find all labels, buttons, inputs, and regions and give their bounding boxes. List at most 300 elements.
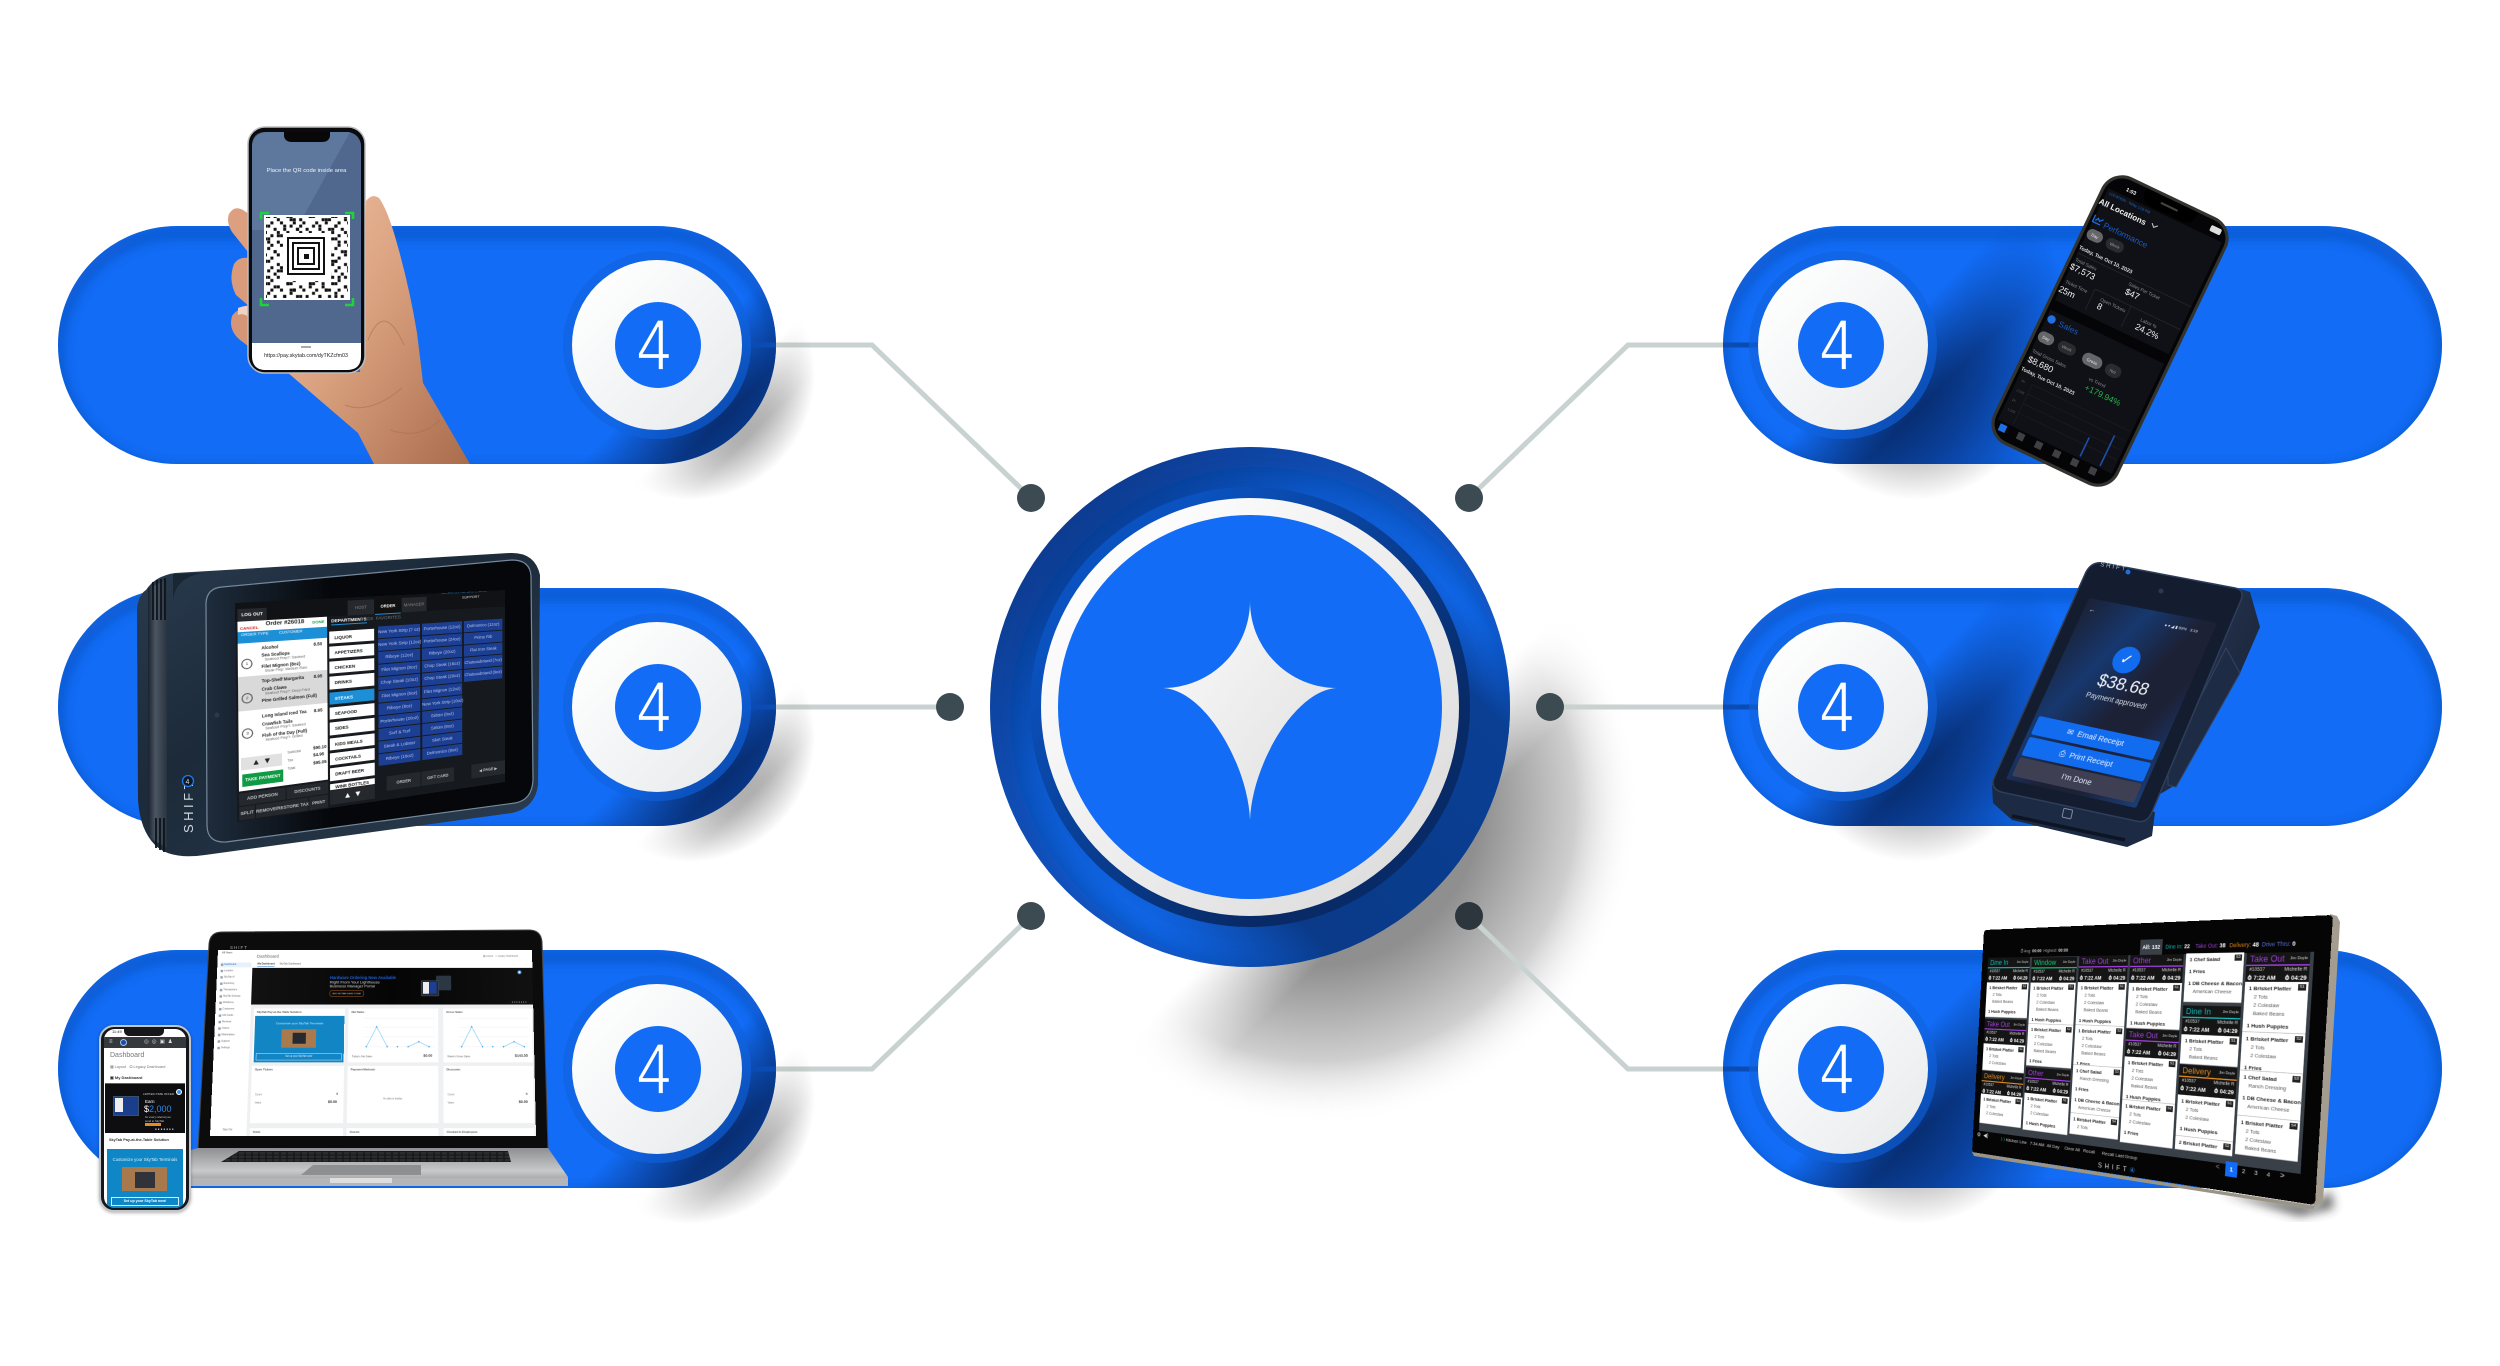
POS screen interface: GIFT CARD	[427, 773, 448, 780]
device: laptop dashboard	[126, 930, 568, 1186]
ticket column 4: 1 Hush Puppies	[2126, 1094, 2161, 1103]
ticket column 5: 1 Fries	[2189, 968, 2205, 974]
ticket column 1: 2 Tots	[1989, 1053, 1999, 1059]
ticket column 5: #10537	[2182, 1078, 2196, 1084]
ticket column 4: 2 Tots	[2136, 994, 2148, 1000]
POS screen interface: APPETIZERS	[334, 648, 363, 655]
laptop screen interface: Settings	[221, 1047, 230, 1049]
ticket column 4: ⏱ 04:29	[2158, 1050, 2176, 1057]
receipt order panel: 2	[246, 695, 248, 700]
ticket column 3: 1 Fries	[2076, 1061, 2090, 1067]
ticket column 2: Michelle R	[2058, 969, 2075, 974]
ticket column 2: 2 Tots	[2037, 992, 2047, 998]
POS screen interface: Porterhouse (20oz)	[380, 715, 419, 724]
POS screen interface: Surf & Turf	[389, 728, 410, 735]
banner: Business Manager Portal	[330, 984, 375, 988]
POS screen interface: SIDES	[335, 725, 349, 731]
ticket column 1: 1 Brisket Platter	[1983, 1096, 2011, 1105]
ticket column 6: Michelle R	[2284, 967, 2307, 972]
POS screen interface: WINE BOTTLES	[335, 779, 369, 789]
POS screen interface: Delmonico (12oz)	[467, 622, 499, 628]
receipt order panel: 1	[246, 661, 248, 666]
ticket column 6: 2 Coleslaw	[2250, 1052, 2276, 1060]
POS screen interface: REMOVE/RESTORE TAX	[256, 801, 309, 814]
card: gross sales chart: Gross Sales	[446, 1011, 463, 1014]
KDS screen interface: 1	[2229, 1166, 2233, 1173]
receipt order panel: Seafood Prep?: Deep Fried	[265, 687, 310, 696]
pill: right middle: 4	[1820, 668, 1854, 748]
POS screen interface: ORDER	[380, 603, 395, 609]
device: dark analytics smartphone: 1:03	[2125, 187, 2137, 197]
ticket column 3: 2 Coleslaw	[2084, 1000, 2104, 1006]
card: open tickets: $0.00	[328, 1100, 337, 1104]
banner	[251, 968, 533, 1005]
card: net sales chart: $0.00	[423, 1054, 432, 1058]
receipt order panel: DONE	[312, 619, 324, 625]
promo banner: ●●●●●●●	[155, 1127, 175, 1131]
receipt order panel: Order #26018	[266, 619, 304, 627]
KDS screen interface: SHIFT④	[2098, 1162, 2138, 1175]
ticket column 2: 2 Coleslaw	[2030, 1110, 2049, 1117]
ticket column 1: #10537	[1990, 969, 2000, 973]
sales section: Today, Tue Oct 10, 2023	[2020, 366, 2075, 397]
device: mobile dashboard phone: 11:49	[112, 1029, 122, 1034]
ticket column 3: S2	[2117, 1029, 2121, 1033]
device: mobile dashboard phone: ◎◎▣♟	[144, 1039, 176, 1045]
header text	[2089, 197, 2159, 250]
ticket column 2: #10537	[2034, 970, 2045, 974]
pill: left bottom: 4	[637, 1030, 671, 1110]
device: POS tablet terminal: 4	[186, 779, 190, 786]
payment approved screen: ● ▾ ◢ ▮ 59% 3:19	[2164, 623, 2199, 634]
ticket column 3: 2 Tots	[2082, 1036, 2093, 1042]
card: open tickets: Count	[255, 1093, 262, 1096]
receipt order panel: 3	[246, 730, 249, 736]
pill: right top	[1723, 226, 2442, 494]
KDS screen interface: All: 132	[2142, 944, 2160, 950]
card: gross sales chart: $143.55	[515, 1054, 528, 1058]
ticket column 6: Baked Beans	[2245, 1144, 2276, 1154]
KDS screen interface: ⟨·⟩ Kitchen Line 7:34 AM	[2001, 1136, 2044, 1148]
POS screen interface: COCKTAILS	[335, 753, 361, 762]
laptop screen interface: Reporting	[224, 982, 234, 985]
ticket column 3: 2 Tots	[2077, 1124, 2088, 1131]
POS screen interface: Filet Mignon (8oz)	[381, 665, 417, 673]
ticket column 1	[1979, 957, 2030, 1128]
ticket column 4: Michelle R	[2162, 968, 2181, 973]
promo banner: $2,000	[144, 1104, 172, 1114]
receipt order panel: $95.05	[313, 759, 327, 766]
header text: Performance	[2102, 220, 2150, 250]
POS screen interface: Chop Steak (16oz)	[424, 661, 460, 669]
order action buttons	[239, 787, 286, 806]
POS screen interface: Ribeye (12oz)	[385, 652, 413, 659]
ticket column 2	[2022, 956, 2078, 1136]
card: discounts: $0.00	[519, 1100, 528, 1104]
POS screen interface: STEAKS	[335, 694, 353, 701]
ticket column 6: 1 Brisket Platter	[2241, 1119, 2283, 1130]
ticket column 4: Michelle R	[2157, 1044, 2177, 1049]
promo banner	[105, 1083, 185, 1133]
POS screen interface: DRINKS	[335, 679, 352, 686]
device: dark analytics smartphone	[1991, 175, 2229, 487]
ticket column 1: #10537	[1986, 1031, 1997, 1035]
ticket column 6: 2 Tots	[2246, 1128, 2260, 1136]
ticket column 3: 1 Brisket Platter	[2081, 985, 2114, 991]
ticket column 4: 2 Coleslaw	[2129, 1119, 2151, 1127]
POS screen interface: Flat Iron Steak	[470, 646, 497, 653]
ticket column 6: 2 Coleslaw	[2245, 1136, 2271, 1145]
payment approved screen	[2006, 598, 2217, 808]
pill: right middle	[1723, 588, 2442, 856]
device: hand holding phone with QR code	[228, 126, 470, 464]
POS screen interface: Skirt Steak	[432, 735, 453, 743]
KDS screen interface: Recall	[2083, 1148, 2095, 1155]
card: discounts: Count	[448, 1093, 454, 1096]
ticket column 2: Window	[2034, 958, 2056, 967]
receipt order panel: TAKE PAYMENT	[245, 773, 281, 783]
ticket column 3: 2 Coleslaw	[2081, 1043, 2102, 1049]
ticket column 4: Baked Beans	[2135, 1009, 2162, 1015]
receipt order panel: Seafood Prep?: Sauteed	[265, 654, 305, 662]
POS screen interface: Porterhouse (12oz)	[424, 624, 460, 631]
ticket column 3: ⏱ 04:29	[2108, 975, 2125, 981]
ticket column 1: Michelle R	[2013, 969, 2028, 973]
bottom control bar: ⚙ ◀)	[1977, 1132, 1988, 1139]
ticket column 4: 2 Tots	[2129, 1111, 2141, 1118]
ticket column 5: ⏱ 7:22 AM	[2183, 1026, 2209, 1033]
pill: left middle	[58, 588, 811, 858]
laptop screen interface: SkyTab Dashboard	[280, 963, 301, 965]
POS screen interface	[235, 590, 505, 822]
ticket column 1: Dine In	[1990, 959, 2009, 967]
KDS screen interface: Drive Thru: 0	[2262, 940, 2296, 948]
card: discounts: 0	[526, 1093, 528, 1096]
card: discounts: Value	[448, 1101, 454, 1105]
ticket column 6: 1 Brisket Platter	[2249, 985, 2292, 992]
laptop screen interface: Clocked In Employees	[447, 1131, 478, 1134]
card: net sales chart	[348, 1008, 438, 1062]
ticket column 3: Jim Doyle	[2112, 959, 2126, 963]
ticket column 1: 1 Hush Puppies	[1988, 1009, 2016, 1015]
ticket column 2: 2 Coleslaw	[2036, 999, 2055, 1005]
card: discounts	[443, 1066, 534, 1123]
receipt order panel: Filet Mignon (8oz)	[261, 661, 300, 669]
ticket column 1: 1 Brisket Platter	[1989, 985, 2018, 991]
receipt order panel: Pine Grilled Salmon (Full)	[262, 693, 317, 703]
ticket column 4: Jim Doyle	[2167, 958, 2182, 962]
laptop screen interface: Marketplace	[221, 1034, 235, 1036]
device: mobile dashboard phone: Dashboard	[110, 1052, 144, 1059]
ticket column 3: #10537	[2081, 969, 2093, 973]
ticket column 2: 2 Tots	[2030, 1103, 2041, 1109]
ticket column 2: Other	[2028, 1069, 2044, 1078]
receipt order panel	[237, 617, 328, 792]
performance metrics	[2056, 255, 2190, 351]
ticket column 6	[2234, 952, 2310, 1162]
banner: ●●●●●●●	[512, 1001, 528, 1003]
receipt order panel: 8.95	[314, 707, 322, 713]
sales section: Day	[2042, 335, 2051, 343]
performance metrics: Sales Per Ticket	[2127, 281, 2161, 302]
KDS screen interface: 3	[2254, 1169, 2258, 1177]
KDS screen interface: 2	[2242, 1168, 2246, 1175]
laptop screen interface: Transactions	[223, 989, 237, 991]
ticket column 1: ⏱ 04:29	[2007, 1090, 2021, 1097]
laptop screen interface: Dashboard	[224, 964, 236, 966]
card: open tickets: Value	[255, 1101, 261, 1105]
ticket column 4: 1 Fries	[2124, 1129, 2139, 1137]
ticket column 6: S4	[2291, 1123, 2296, 1128]
KDS screen interface: All Day	[2047, 1143, 2060, 1150]
menu item grid	[378, 624, 420, 638]
sales section: Gross	[2086, 357, 2098, 366]
device: laptop dashboard: SHIFT	[230, 945, 248, 950]
KDS screen interface: Clear All	[2064, 1145, 2080, 1153]
receipt order panel: Crab Claws	[262, 684, 287, 692]
ticket column 6: 2 Tots	[2254, 994, 2268, 1000]
POS screen interface: Chateaubriand (9oz)	[464, 670, 502, 678]
laptop screen interface: Support	[221, 1040, 230, 1043]
receipt order panel: CANCEL	[240, 625, 259, 631]
device: dark analytics smartphone: Week	[2109, 241, 2121, 250]
performance metrics: 8	[2095, 301, 2104, 312]
receipt order panel: 8.95	[314, 673, 322, 679]
sales chart: 2K	[2011, 398, 2017, 403]
banner: ADD SKYTAB GLASS TODAY	[333, 992, 361, 995]
promo banner: for every referral you	[145, 1115, 171, 1119]
ticket column 1: ⏱ 04:29	[2013, 975, 2028, 981]
ticket column 4: ⏱ 7:22 AM	[2131, 975, 2155, 981]
promo video card	[107, 1149, 183, 1208]
ticket column 3: Baked Beans	[2084, 1007, 2108, 1013]
laptop screen interface: SkyTab Settings	[223, 995, 240, 998]
sales section: Total Gross Sales	[2031, 348, 2068, 370]
ticket column 5: 1 Brisket Platter	[2181, 1098, 2220, 1107]
performance metrics: Ticket Time	[2064, 279, 2089, 295]
ticket column 6: ⏱ 7:22 AM	[2247, 974, 2276, 981]
ticket column 5: 1 Hush Puppies	[2180, 1125, 2218, 1136]
ticket column 1: ⏱ 7:22 AM	[1988, 975, 2007, 981]
sales section: +179.94%	[2083, 382, 2123, 408]
payment approved screen: I'm Done	[2060, 772, 2093, 787]
ticket column 3: Take Out	[2081, 957, 2109, 966]
POS screen interface: Chop Steak (10oz)	[381, 677, 418, 685]
ticket column 5: 2 Coleslaw	[2185, 1114, 2209, 1123]
KDS screen interface: >	[2280, 1171, 2285, 1180]
card: discounts: Discounts	[446, 1068, 460, 1071]
POS screen interface: ORDER	[396, 778, 411, 785]
POS screen interface: Ribeye (16oz)	[386, 753, 414, 761]
device: dark analytics smartphone: LOCATION - Today 1:03 PM	[2108, 192, 2151, 215]
device: mobile dashboard phone: ▦ Layout ⬭ Legacy Dashboard	[110, 1065, 165, 1069]
sales section	[2020, 312, 2143, 417]
ticket column 2: Baked Beans	[2034, 1048, 2056, 1055]
laptop screen interface: All Users	[222, 952, 232, 954]
ticket column 6: Baked Beans	[2253, 1010, 2285, 1017]
receipt order panel: Alcohol	[261, 644, 278, 650]
ticket column 6: Ranch Dressing	[2248, 1083, 2286, 1092]
ticket column 1: ⏱ 7:22 AM	[1982, 1088, 2001, 1095]
ticket column 6: S2	[2296, 1037, 2302, 1041]
payment approved screen: $38.68	[2094, 670, 2153, 699]
POS screen interface: CHICKEN	[335, 664, 355, 670]
central hub soft shadow	[1170, 655, 1614, 1100]
POS screen interface: LOG OUT	[241, 611, 263, 617]
card: pay at table: Customize your SkyTab Terminals	[276, 1022, 323, 1025]
POS screen interface: Filet Mignon (6oz)	[381, 690, 417, 698]
diagram base: pills, connectors and central hub	[58, 226, 2442, 1220]
ticket column 4: Take Out	[2129, 1030, 2158, 1040]
sales chart: 2.50K	[2016, 388, 2026, 396]
POS screen interface: KIDS MEALS	[335, 738, 363, 746]
card: open tickets	[250, 1066, 344, 1123]
icon: check mark	[2108, 644, 2145, 676]
ticket column 5: 2 Tots	[2189, 1046, 2202, 1052]
ticket column 3: 1 Brisket Platter	[2078, 1028, 2111, 1035]
receipt order panel: Crawfish Tails	[262, 718, 293, 727]
laptop screen interface	[210, 950, 536, 1136]
ticket column 1: S1	[2023, 985, 2026, 988]
POS screen interface: Ribeye (8oz)	[387, 703, 412, 710]
ticket column 6: #10537	[2249, 967, 2265, 972]
ticket column 4: 1 Hush Puppies	[2130, 1020, 2165, 1027]
performance metrics: 24.2%	[2133, 321, 2161, 341]
ticket column 2: 1 Hush Puppies	[2026, 1120, 2056, 1129]
device: payment terminal: SHIFT	[2100, 562, 2128, 573]
POS screen interface: LIQUOR	[334, 634, 352, 640]
laptop screen interface: My Dashboard	[257, 963, 275, 965]
ticket column 5: Jim Doyle	[2222, 1010, 2239, 1015]
ticket column 5: Jim Doyle	[2219, 1071, 2235, 1076]
ticket column 4: 1 Brisket Platter	[2128, 1060, 2163, 1068]
ticket column 2: 1 Brisket Platter	[2027, 1096, 2057, 1104]
receipt order panel: $90.10	[313, 744, 327, 751]
promo banner: LIMITED-TIME OFFER	[143, 1092, 174, 1096]
ticket column 1: 1 Brisket Platter	[1986, 1046, 2014, 1053]
ticket column 4: Jim Doyle	[2162, 1034, 2177, 1039]
card row: voids guests employees: Voids	[253, 1131, 260, 1134]
ticket column 1: Take Out	[1987, 1020, 2010, 1029]
phone: Place the QR code inside area	[267, 168, 347, 174]
ticket column 5: American Cheese	[2193, 988, 2232, 995]
ticket column 3: 1 DB Cheese & Bacon	[2074, 1097, 2120, 1107]
ticket column 2: ⏱ 7:22 AM	[2026, 1085, 2046, 1093]
promo video card: Customize your SkyTab Terminals	[113, 1157, 177, 1162]
ticket column 2: 1 Fries	[2029, 1058, 2042, 1064]
ticket column 5: S1	[2231, 1039, 2236, 1043]
ticket column 6: ⏱ 04:29	[2285, 974, 2307, 981]
banner: Right From Your Lighthouse	[330, 980, 380, 984]
POS screen interface: DRAFT BEER	[335, 768, 364, 777]
KDS screen interface: Dine In: 22	[2165, 943, 2190, 950]
top status bar: ⏱ Avg: 00:00 Highest: 00:00	[2020, 947, 2068, 954]
ticket column 5: Michelle R	[2217, 1020, 2238, 1026]
header text: All Locations	[2097, 197, 2148, 227]
ticket column 1: ⏱ 04:29	[2010, 1037, 2024, 1044]
POS screen interface: Ribeye (20oz)	[429, 649, 455, 656]
receipt order panel: $4.95	[313, 751, 324, 758]
receipt order panel: Seafood Prep?: Sauteed	[265, 722, 306, 731]
sales section: Net	[2109, 368, 2118, 375]
ticket column 5: S2	[2225, 1144, 2229, 1149]
ticket column 4: ⏱ 7:22 AM	[2127, 1048, 2150, 1056]
POS screen interface: New York Strip (12oz)	[378, 639, 421, 647]
POS screen interface: Sirloin (8oz)	[431, 723, 454, 730]
ticket column 1: Jim Doyle	[2013, 1023, 2025, 1027]
ticket column 2: S2	[2067, 1028, 2071, 1031]
ticket column 3: Baked Beans	[2081, 1050, 2106, 1057]
ticket column 4: S1	[2170, 1062, 2174, 1066]
ticket column 5: ⏱ 7:22 AM	[2180, 1085, 2206, 1093]
sales section: Sales	[2057, 319, 2080, 337]
ticket column 6: 1 Chef Salad	[2243, 1074, 2277, 1083]
performance metrics: Labor %	[2139, 317, 2158, 331]
receipt order panel: ▲ ▼	[252, 756, 272, 767]
KDS screen interface: Take Out: 38	[2195, 942, 2226, 949]
ticket column 2: 1 Brisket Platter	[2033, 985, 2064, 991]
performance metrics: $47	[2123, 286, 2141, 302]
POS screen interface: ◀ PAGE ▶	[479, 766, 497, 773]
performance metrics: Open Tickets	[2099, 297, 2127, 315]
ticket column 4: #10537	[2132, 968, 2146, 973]
receipt order panel: Tax	[287, 758, 293, 763]
pill: left bottom	[58, 950, 811, 1220]
ticket column 1: #10537	[1984, 1082, 1994, 1087]
POS screen interface: Delmonico (8oz)	[427, 747, 458, 756]
device: mobile dashboard phone: SkyTab Pay-at-the-Table Solution	[109, 1138, 169, 1142]
sales chart: 3K	[2020, 379, 2026, 385]
performance metrics: $7,573	[2068, 261, 2097, 282]
connector lines	[770, 345, 1730, 1069]
ticket column 2: 2 Tots	[2034, 1034, 2044, 1040]
ticket column 3: 1 Brisket Platter	[2073, 1116, 2106, 1125]
pill: left middle: 4	[637, 668, 671, 748]
ticket column 1: Michelle R	[2009, 1032, 2025, 1036]
ticket column 6: 1 Fries	[2244, 1064, 2262, 1072]
POS screen interface: HOST	[355, 605, 367, 610]
payment approved screen: ←	[2088, 605, 2098, 614]
ticket column 3: Ranch Dressing	[2080, 1075, 2109, 1083]
ticket column 3: S4	[2112, 1120, 2116, 1124]
ticket column 2: #10537	[2027, 1080, 2039, 1085]
ticket column 1: Jim Doyle	[2010, 1076, 2022, 1081]
ticket column 5: 2 Brisket Platter	[2179, 1139, 2218, 1150]
device: mobile dashboard phone	[99, 1025, 191, 1212]
performance metrics: Total Sales	[2074, 257, 2098, 273]
ticket column 1: ⏱ 7:22 AM	[1985, 1036, 2004, 1043]
hand	[228, 196, 470, 464]
receipt order panel: Steak Prep: Medium Rare	[265, 665, 307, 673]
ticket column 6: Take Out	[2250, 954, 2285, 964]
pill: right bottom: 4	[1820, 1030, 1854, 1110]
receipt order panel: Long Island Iced Tea	[262, 709, 307, 719]
POS screen interface: ▲ ▼	[344, 789, 362, 800]
ticket column 1: 2 Coleslaw	[1986, 1110, 2003, 1117]
icon: check mark: ✓	[2117, 650, 2136, 668]
menu item grid: New York Strip (7 oz)	[378, 627, 420, 634]
ticket column 3: ⏱ 7:22 AM	[2080, 975, 2102, 981]
POS screen interface: PRINT	[312, 799, 325, 806]
KDS screen interface: Delivery: 48	[2229, 941, 2259, 949]
card: payment methods: No data to display	[383, 1097, 402, 1100]
ticket column 4: 2 Coleslaw	[2131, 1075, 2153, 1083]
ticket column 2: 1 Brisket Platter	[2031, 1027, 2061, 1033]
promo banner: send to SkyTab	[145, 1119, 164, 1123]
device: kitchen display screen	[1972, 914, 2340, 1222]
ticket column 2: S1	[2069, 985, 2073, 989]
ticket column 1: Delivery	[1984, 1072, 2005, 1082]
